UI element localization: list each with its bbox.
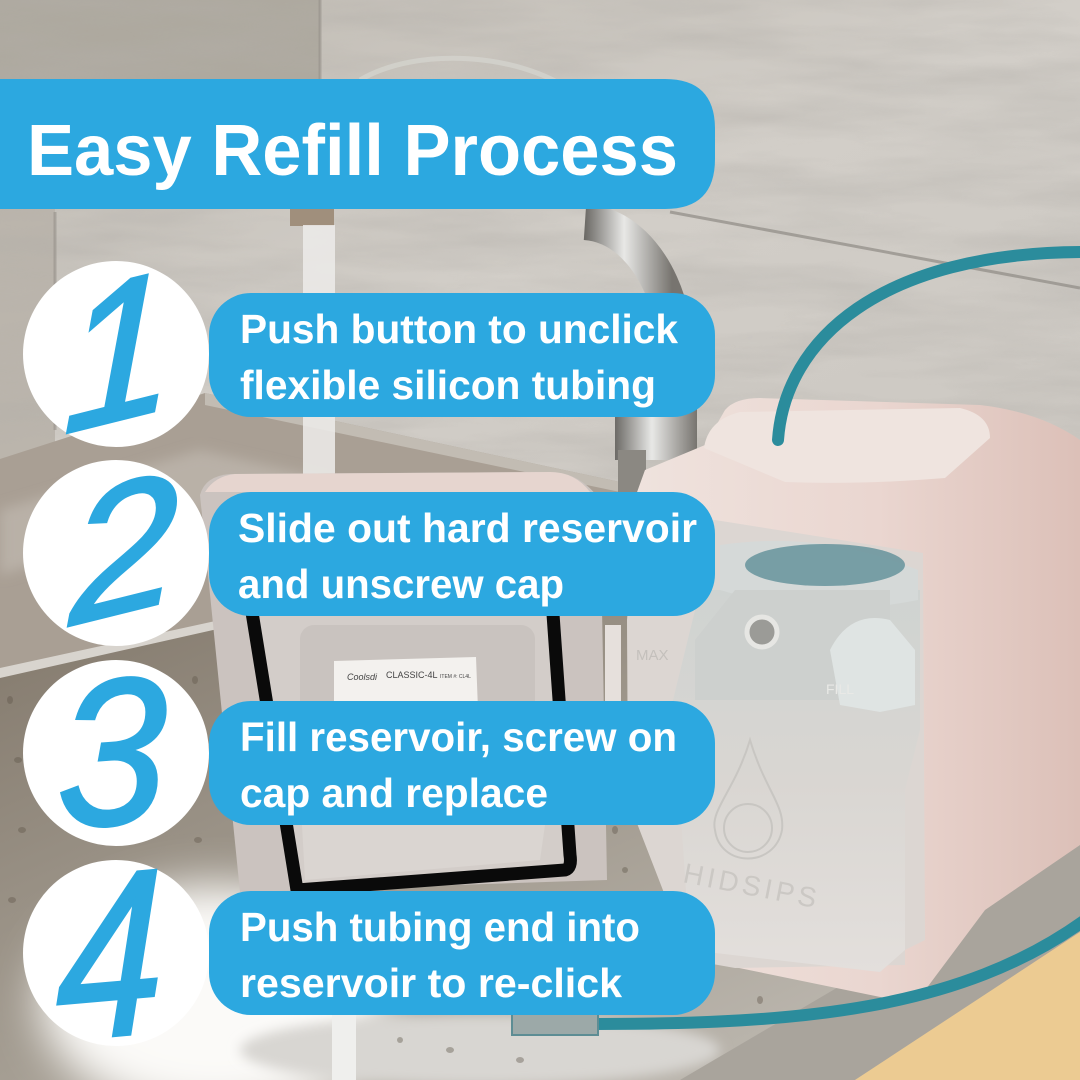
specification label: CLASSIC-4L — [386, 670, 438, 680]
water stream — [303, 225, 356, 1080]
step 2 — [23, 431, 715, 666]
step 1 text pill: Push button to unclick — [240, 306, 678, 352]
step 1 text pill: flexible silicon tubing — [240, 362, 656, 408]
number badge 1 — [23, 261, 209, 447]
step 2 text pill: and unscrew cap — [238, 561, 564, 607]
specification label: Coolsdi — [347, 672, 378, 682]
step 4 text pill — [209, 891, 715, 1015]
step 3 — [23, 633, 715, 873]
step 1 text pill — [209, 293, 715, 417]
number badge 3 — [23, 660, 209, 846]
reservoir — [627, 520, 925, 972]
specification label — [334, 657, 478, 701]
sink basin — [0, 616, 836, 1080]
open door panel — [200, 472, 621, 892]
number badge 3: 3 — [57, 633, 167, 873]
wall tiles — [0, 0, 1080, 520]
step 1 — [23, 226, 715, 477]
cooler body — [627, 398, 1080, 1000]
water droplets — [7, 676, 813, 1063]
step 4 text pill: reservoir to re-click — [240, 960, 622, 1006]
reservoir: MAX — [636, 647, 669, 664]
number badge 2: 2 — [68, 431, 178, 666]
reservoir: HIDSIPS — [681, 857, 819, 914]
number badge 1: 1 — [62, 226, 174, 477]
title banner — [0, 79, 715, 209]
faucet — [290, 58, 697, 495]
step 3 text pill: cap and replace — [240, 770, 548, 816]
title banner: Easy Refill Process — [27, 111, 678, 191]
number badge 4 — [23, 860, 206, 1046]
drop logo — [714, 740, 782, 858]
step 3 text pill: Fill reservoir, screw on — [240, 714, 677, 760]
specification label: ITEM #: CL4L — [440, 674, 471, 680]
sink ledge — [0, 393, 618, 668]
number badge 2 — [23, 460, 209, 646]
cooler lid — [704, 408, 990, 483]
step 4 — [23, 860, 715, 1046]
teal tubing — [512, 252, 1080, 1035]
step 3 text pill — [209, 701, 715, 825]
door hinge — [605, 625, 621, 703]
step 2 text pill — [209, 492, 715, 616]
step 2 text pill: Slide out hard reservoir — [238, 505, 697, 551]
counter edge and wood — [680, 845, 1080, 1080]
water glare — [40, 885, 390, 1080]
step 4 text pill: Push tubing end into — [240, 904, 640, 950]
reservoir: FILL — [826, 681, 854, 697]
